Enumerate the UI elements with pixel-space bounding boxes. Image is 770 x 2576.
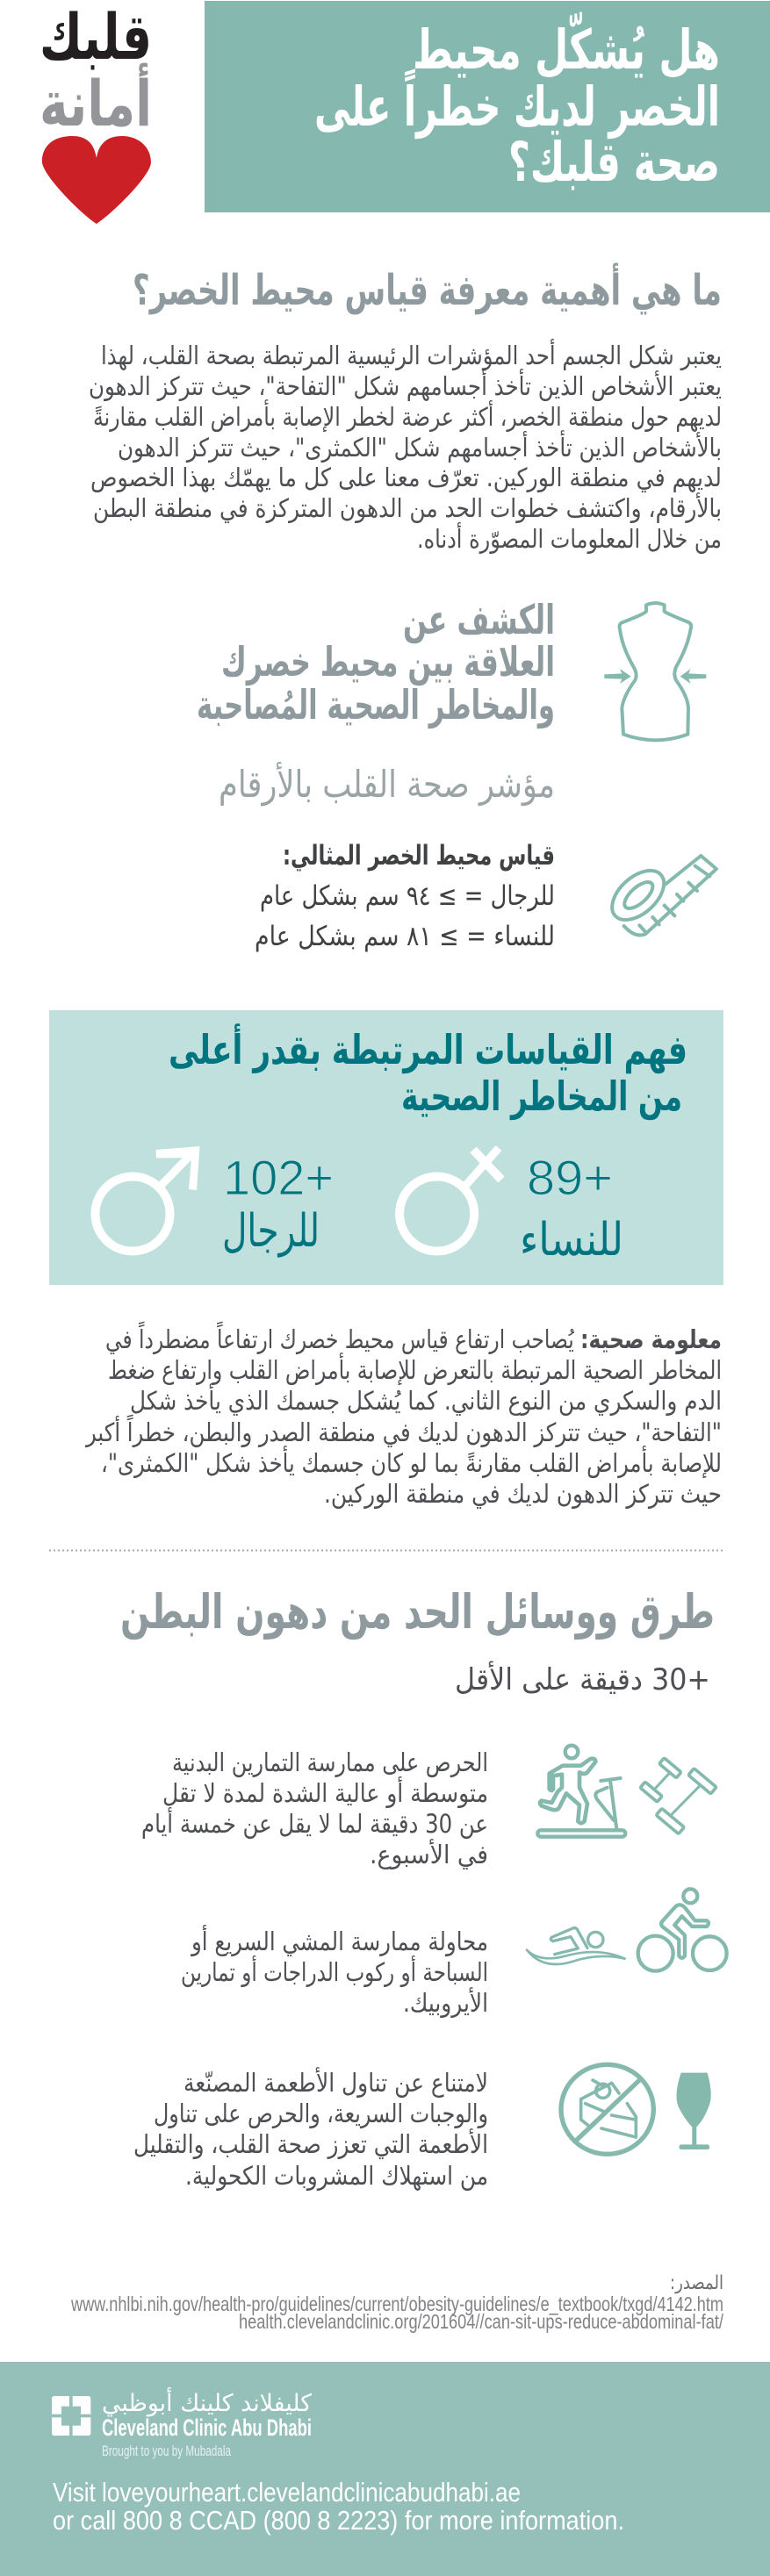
text: walking and swimming: السباحة أو ركوب الدراجات أو تمارين [181, 1955, 488, 1987]
contact text: or call 800 8 CCAD (800 8 2223) for more information. [53, 2505, 624, 2536]
text: exercise: في الأسبوع. [370, 1838, 488, 1870]
men label: للرجال [222, 1205, 320, 1258]
text: diet and alcohol: لامتناع عن تناول الأطعمة المصنّعة [184, 2066, 488, 2098]
title panel [205, 1, 770, 212]
text: diet and alcohol [133, 2066, 488, 2191]
heading: waist and health risks: الكشف عن [403, 596, 555, 643]
intro paragraph [89, 338, 722, 554]
icon: wine glass [676, 2073, 711, 2149]
heading: waist and health risks: والمخاطر الصحية المُصاحبة [197, 681, 555, 728]
logo text: grey word: أمانة [40, 62, 152, 140]
contact text: Visit loveyourheart.clevelandclinicabudhabi.ae [53, 2477, 521, 2508]
panel heading [169, 1023, 687, 1120]
icon: runner on treadmill [537, 1746, 625, 1837]
clinic name arabic: كليفلاند كلينك أبوظبي [102, 2386, 312, 2417]
icon: cyclist [638, 1889, 727, 1971]
ideal waist measurements [255, 840, 555, 952]
text: walking and swimming: محاولة ممارسة المشي السريع أو [190, 1924, 488, 1957]
text: exercise: الحرص على ممارسة التمارين البدنية [172, 1747, 488, 1777]
text: diet and alcohol: من استهلاك المشروبات الكحولية. [185, 2161, 488, 2191]
women label: للنساء [520, 1214, 623, 1266]
sources [70, 2272, 723, 2333]
title [314, 11, 720, 194]
women value: 89+ [527, 1150, 613, 1205]
health fact paragraph [84, 1322, 722, 1510]
men value: 102+ [223, 1150, 334, 1205]
text: walking and swimming [181, 1924, 488, 2018]
icon: clinic logo mark [52, 2396, 90, 2436]
text: exercise: عن 30 دقيقة لما لا يقل عن خمسة أيام [141, 1806, 488, 1839]
contact text [53, 2477, 624, 2536]
heading: waist and health risks [197, 596, 555, 728]
logo: heart brand mark [40, 0, 152, 224]
ideal waist measurements: للرجال = ≥ ٩٤ سم بشكل عام [260, 880, 555, 912]
footer band [0, 2362, 770, 2576]
clinic name english: Cleveland Clinic Abu Dhabi [102, 2415, 312, 2441]
ideal waist measurements: للنساء = ≥ ٨١ سم بشكل عام [255, 921, 555, 952]
icon: dumbbells [640, 1758, 716, 1834]
text: exercise [141, 1747, 488, 1870]
icon: measuring tape [603, 856, 716, 935]
ideal waist measurements: قياس محيط الخصر المثالي: [283, 840, 555, 872]
icon: no cake [561, 2064, 653, 2154]
subheading: 30 minutes minimum: +30 دقيقة على الأقل [455, 1661, 710, 1697]
icon: red heart [42, 136, 151, 224]
health fact paragraph: معلومة صحية: يُصاحب ارتفاع قياس محيط خصرك ارتفاعاً مضطرداً في [105, 1322, 722, 1355]
panel: higher-risk measurements [49, 1010, 723, 1285]
icon: male symbol [95, 1146, 200, 1252]
text: diet and alcohol: الأطعمة التي تعزز صحة القلب، والتقليل [133, 2128, 488, 2160]
icon: swimmer [527, 1928, 625, 1964]
sources: المصدر: [670, 2272, 723, 2294]
icon: dress form with arrows [604, 603, 706, 740]
text: walking and swimming: الأيروبيك. [403, 1986, 488, 2018]
logo text: black word: قلبك [40, 0, 152, 74]
text: exercise: متوسطة أو عالية الشدة لمدة لا تقل [162, 1776, 488, 1808]
icon: female symbol [399, 1148, 501, 1252]
subheading: heart health by numbers: مؤشر صحة القلب بالأرقام [219, 761, 555, 806]
tagline: Brought to you by Mubadala [102, 2443, 231, 2459]
heading: waist and health risks: العلاقة بين محيط خصرك [221, 638, 555, 685]
text: diet and alcohol: والوجبات السريعة، والحرص على تناول [154, 2099, 488, 2128]
